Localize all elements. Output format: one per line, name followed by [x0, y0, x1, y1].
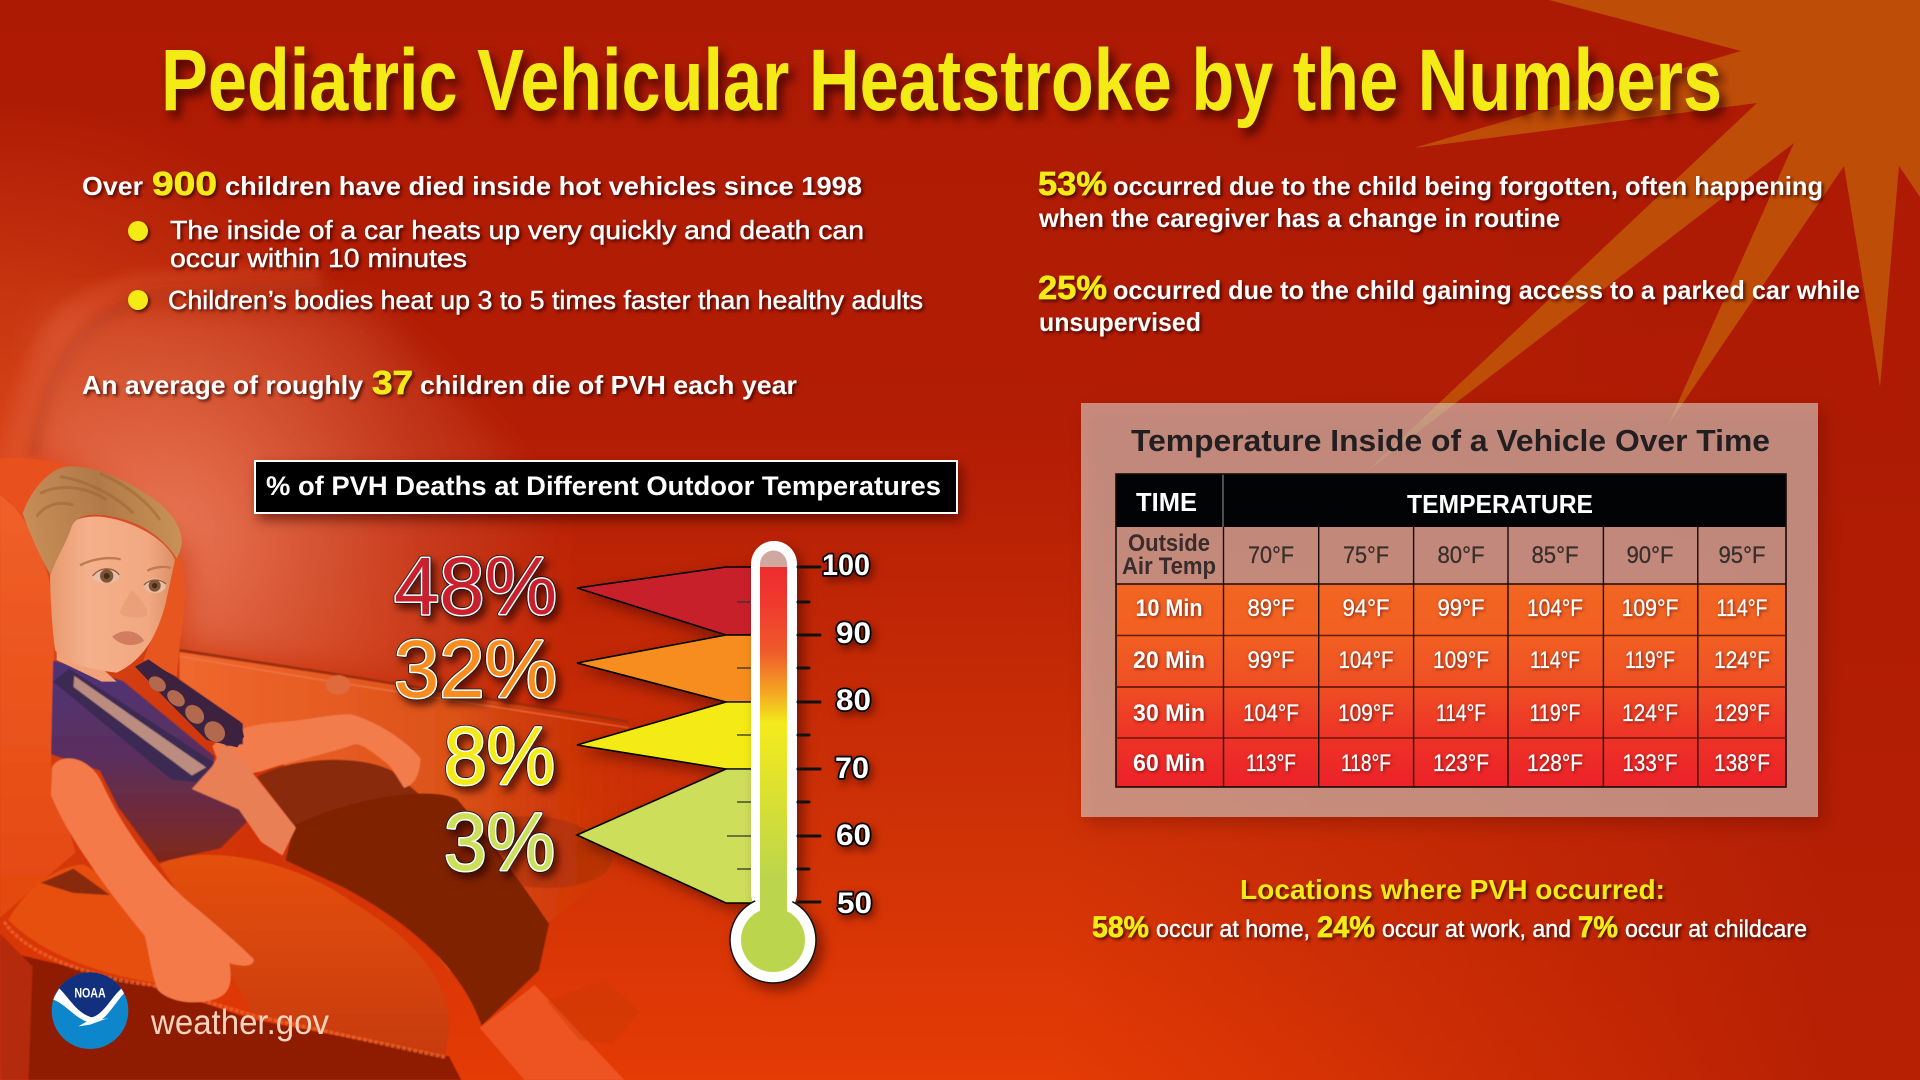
fact: average of 37: 37 — [372, 364, 413, 401]
website label: weather.gov — [150, 1003, 329, 1042]
temperature scale labels: 60 — [836, 819, 871, 852]
row: 30 minutes — [1133, 700, 1770, 727]
logo: NOAA: NOAA — [74, 984, 106, 1000]
row: outside air temp — [1122, 530, 1766, 580]
table grid — [1116, 474, 1786, 787]
seat strap — [41, 869, 110, 895]
percentage labels — [394, 541, 557, 888]
nose — [120, 590, 147, 618]
row: 30 minutes: 30 Min — [1133, 700, 1205, 727]
bullet: car heats quickly: occur within 10 minutes — [170, 243, 467, 273]
row: outside air temp: 75°F — [1343, 542, 1389, 569]
label: 48 percent: 48% — [394, 541, 557, 632]
temperature scale labels: 100 — [822, 549, 870, 582]
car window haze — [29, 305, 612, 718]
label: 3 percent: 3% — [444, 797, 555, 888]
table header row: TIME — [1136, 487, 1197, 517]
table header row — [1116, 474, 1786, 527]
door lock — [326, 675, 350, 695]
text block: causes, right column — [1038, 165, 1860, 337]
hair strands — [37, 473, 160, 520]
trousers — [286, 794, 549, 1026]
bullet: car heats quickly: The inside of a car heats up very quickly and death can — [170, 215, 864, 245]
thermometer — [727, 541, 872, 983]
hair — [23, 466, 182, 575]
cause: 53 percent forgotten: when the caregiver has a change in routine — [1038, 203, 1560, 233]
shoulder harness lumps — [135, 659, 244, 747]
label: 32 percent: 32% — [394, 624, 557, 715]
headrest wing — [143, 552, 185, 677]
row: 30 minutes: 119°F — [1530, 700, 1580, 727]
row: 30 minutes: 104°F — [1243, 700, 1299, 727]
panel heading: Temperature Inside of a Vehicle Over Time — [1131, 423, 1770, 458]
row: 10 minutes — [1136, 595, 1768, 622]
sunburst in the top right corner — [1366, 0, 1920, 472]
row: 10 minutes: 94°F — [1342, 595, 1390, 622]
eyes — [93, 569, 166, 593]
label: 8 percent: 8% — [444, 711, 555, 802]
locations figures: occur at home, — [1156, 916, 1310, 943]
chest harness pad — [53, 669, 214, 782]
cause: 25 percent gained access: occurred due to the child gaining access to a parked car while — [1113, 275, 1860, 305]
row: 20 minutes: 99°F — [1248, 647, 1294, 674]
temperature scale labels: 90 — [836, 617, 871, 650]
row: 30 minutes: 114°F — [1436, 700, 1486, 727]
headrest top — [0, 458, 70, 513]
locations figures: 58% — [1092, 911, 1149, 944]
label: 3 percent: 3% — [444, 797, 555, 888]
shoe — [547, 981, 640, 1044]
row: 10 minutes: 99°F — [1438, 595, 1484, 622]
wedge: red — [577, 567, 755, 635]
locations figures — [1092, 911, 1807, 944]
mouth — [112, 631, 144, 645]
wedge: orange — [577, 635, 755, 702]
row: 60 minutes: 60 Min — [1133, 750, 1205, 777]
child's head and seat headrest — [0, 458, 244, 747]
locations figures: occur at childcare — [1625, 916, 1807, 943]
shoulder harness pad — [137, 660, 243, 746]
row: 60 minutes: 133°F — [1622, 750, 1678, 777]
row: 20 minutes: 114°F — [1530, 647, 1580, 674]
door pull handle — [498, 816, 612, 888]
row: 10 minutes: 104°F — [1527, 595, 1583, 622]
panel background — [1081, 403, 1818, 817]
cause: 25 percent gained access: 25% — [1038, 269, 1107, 306]
cause: 25 percent gained access — [1038, 269, 1860, 337]
other arm and hand — [212, 714, 420, 788]
fact: over 900 children: children have died inside hot vehicles since 1998 — [225, 171, 862, 201]
row: 20 minutes: 119°F — [1625, 647, 1675, 674]
logo: NOAA — [52, 972, 128, 1049]
fact: over 900 children: 900 — [152, 165, 217, 202]
wedge: green — [577, 769, 755, 903]
row: 60 minutes: 138°F — [1714, 750, 1770, 777]
photo: child in car seat, orange duotone — [0, 305, 640, 1080]
thermometer body — [730, 541, 816, 983]
locations figures: 7% — [1578, 911, 1618, 944]
seat cushion under arm — [8, 864, 163, 983]
heated rows background — [1116, 584, 1786, 787]
row: outside air temp: 85°F — [1532, 542, 1578, 569]
row: 20 minutes — [1133, 647, 1770, 674]
fact: over 900 children — [82, 165, 862, 202]
cause: 53 percent forgotten: 53% — [1038, 165, 1107, 202]
bullet: car heats quickly — [128, 215, 864, 273]
upper trousers behind arm — [257, 760, 420, 826]
temperature scale labels: 70 — [835, 752, 869, 785]
row: outside air temp: Air Temp — [1122, 553, 1216, 580]
label: 3 percent: 3% — [444, 797, 555, 888]
fact: over 900 children: Over — [82, 171, 143, 201]
child's shin — [480, 985, 624, 1080]
face — [50, 517, 175, 673]
seat pad stitching — [4, 922, 445, 1057]
eyebrows — [80, 558, 171, 571]
chart heading: percent of deaths — [255, 461, 957, 513]
label: 8 percent: 8% — [444, 711, 555, 802]
row: 60 minutes: 128°F — [1527, 750, 1583, 777]
table header row: TEMPERATURE — [1407, 489, 1593, 519]
shirt — [51, 660, 249, 862]
tick marks — [727, 567, 820, 902]
mercury column — [741, 550, 805, 972]
temperature scale labels: 50 — [837, 887, 872, 920]
label: 48 percent: 48% — [394, 541, 557, 632]
seat pad on lap — [159, 855, 449, 1057]
row: 10 minutes: 89°F — [1248, 595, 1294, 622]
seat left bolster — [0, 493, 76, 918]
seat belt — [192, 740, 296, 856]
fact: average of 37 — [82, 364, 797, 401]
locations figures: 24% — [1317, 911, 1375, 944]
label: 48 percent: 48% — [394, 541, 557, 632]
door sill line — [180, 650, 629, 722]
row: 10 minutes: 109°F — [1622, 595, 1678, 622]
table: temperature over time — [1116, 474, 1786, 787]
row: 30 minutes: 109°F — [1338, 700, 1394, 727]
row: 20 minutes: 109°F — [1433, 647, 1489, 674]
row: outside air temp: 95°F — [1718, 542, 1766, 569]
row: 60 minutes: 123°F — [1433, 750, 1489, 777]
row: 30 minutes: 129°F — [1714, 700, 1770, 727]
car window arch behind child — [14, 276, 330, 460]
temperature scale labels: 80 — [836, 684, 871, 717]
fact: average of 37: An average of roughly — [82, 370, 364, 400]
chart heading: percent of deaths: % of PVH Deaths at Different Outdoor Temperatures — [266, 471, 941, 501]
text block: locations where PVH occurred — [1092, 874, 1807, 944]
row: 60 minutes: 113°F — [1246, 750, 1296, 777]
row: 60 minutes — [1133, 750, 1770, 777]
bullet: bodies heat faster: Children’s bodies heat up 3 to 5 times faster than healthy adults — [168, 285, 923, 315]
locations figures: occur at work, and — [1382, 916, 1571, 943]
cause: 53 percent forgotten: occurred due to the child being forgotten, often happening — [1113, 171, 1823, 201]
arm resting on pad — [51, 758, 254, 1002]
dark footwell under seat — [16, 954, 461, 1080]
wedges pointing from thermometer to percentages — [577, 567, 755, 903]
row: outside air temp: 70°F — [1248, 542, 1294, 569]
row: 10 minutes: 10 Min — [1136, 595, 1202, 622]
cause: 53 percent forgotten — [1038, 165, 1823, 233]
row: outside air temp: 80°F — [1438, 542, 1484, 569]
text block: key facts, left column — [82, 165, 923, 401]
row: 20 minutes: 20 Min — [1133, 647, 1205, 674]
row: outside air temp: Outside — [1128, 530, 1210, 557]
label: 32 percent: 32% — [394, 624, 557, 715]
row: 60 minutes: 118°F — [1341, 750, 1391, 777]
cause: 25 percent gained access: unsupervised — [1039, 307, 1201, 337]
row: 10 minutes: 114°F — [1716, 595, 1768, 622]
panel: temperature inside a vehicle over time — [1081, 403, 1818, 817]
row: outside air temp: 90°F — [1626, 542, 1674, 569]
label: 32 percent: 32% — [394, 624, 557, 715]
row: 20 minutes: 104°F — [1338, 647, 1394, 674]
neck — [57, 650, 117, 682]
locations heading: Locations where PVH occurred: — [1240, 874, 1665, 905]
fact: average of 37: children die of PVH each year — [420, 370, 797, 400]
row: 20 minutes: 124°F — [1714, 647, 1770, 674]
label: 8 percent: 8% — [444, 711, 555, 802]
row: 30 minutes: 124°F — [1622, 700, 1678, 727]
wedge: yellow — [577, 702, 755, 769]
temperature scale labels — [822, 549, 872, 920]
car door panel — [180, 652, 640, 971]
